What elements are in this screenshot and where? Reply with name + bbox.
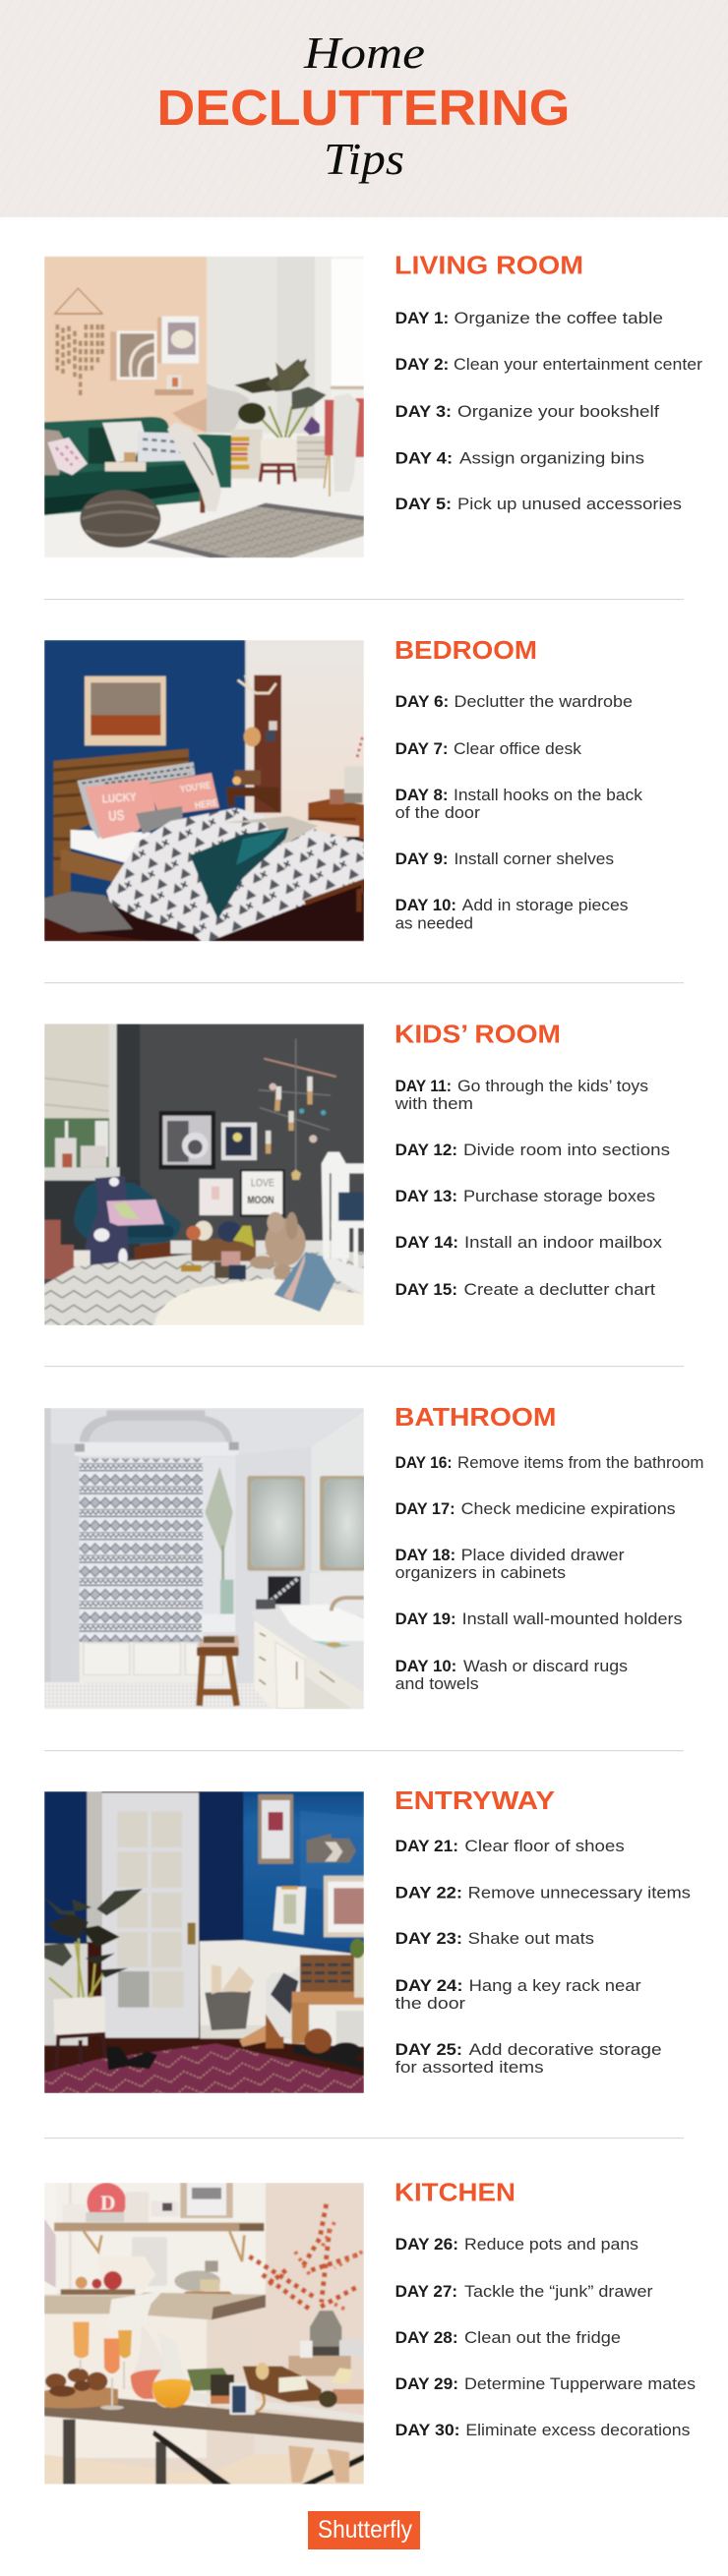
tip: day 18: DAY 18:	[395, 1547, 455, 1564]
tip: day 29: Determine Tupperware mates	[464, 2375, 696, 2393]
photo: bedroom: HERE	[194, 797, 219, 812]
photo: bedroom	[44, 640, 364, 941]
tip: day 9: DAY 9:	[395, 850, 449, 868]
heading: bedroom: BEDROOM	[394, 637, 537, 665]
tip: day 1	[395, 310, 663, 327]
tip: day 10 (bathroom)	[395, 1658, 628, 1693]
photo: entryway	[44, 1791, 365, 2093]
tip: day 18: organizers in cabinets	[395, 1564, 566, 1582]
tip: day 12: DAY 12:	[395, 1142, 457, 1159]
tip: day 17: Check medicine expirations	[461, 1500, 676, 1518]
panel: bathroom	[44, 1404, 704, 1709]
tip: day 5: Pick up unused accessories	[457, 496, 682, 513]
tip: day 10: Add in storage pieces	[462, 897, 629, 914]
tip: day 25: DAY 25:	[395, 2041, 462, 2059]
tip: day 19: Install wall-mounted holders	[462, 1610, 683, 1628]
tip: day 28: DAY 28:	[395, 2329, 458, 2347]
heading: kids' room: KIDS’ ROOM	[394, 1022, 561, 1049]
tip: day 25: Add decorative storage	[469, 2041, 662, 2059]
tip: day 8: Install hooks on the back	[454, 787, 643, 804]
tip: day 9: Install corner shelves	[455, 850, 614, 868]
tip: day 11: Go through the kids’ toys	[457, 1078, 648, 1095]
tip: day 10	[395, 897, 629, 932]
tip: day 6: DAY 6:	[395, 693, 449, 711]
tip: day 8: DAY 8:	[395, 787, 449, 804]
tip: day 10 (bathroom): Wash or discard rugs	[463, 1658, 628, 1675]
panel: entryway	[44, 1787, 691, 2093]
title: Home: Home	[303, 28, 425, 78]
tip: day 6: Declutter the wardrobe	[455, 693, 633, 711]
panel: kids' room	[44, 1022, 670, 1325]
panel: kitchen	[44, 2180, 696, 2485]
tip: day 4: Assign organizing bins	[459, 450, 644, 468]
tip: day 27: DAY 27:	[395, 2283, 457, 2301]
tip: day 22: DAY 22:	[395, 1885, 462, 1903]
photo: kids' room: LOVE	[251, 1178, 274, 1190]
photo: kids' room: MOON	[247, 1195, 274, 1206]
tip: day 30: Eliminate excess decorations	[465, 2422, 690, 2439]
tip: day 9	[395, 850, 614, 868]
tip: day 28: Clean out the fridge	[464, 2329, 621, 2347]
tip: day 29: DAY 29:	[395, 2375, 458, 2393]
tip: day 4	[395, 450, 644, 468]
tip: day 11	[394, 1078, 648, 1113]
photo: bedroom: US	[108, 808, 125, 825]
tip: day 24: DAY 24:	[395, 1977, 462, 1995]
tip: day 24	[395, 1977, 641, 2013]
tip: day 14: Install an indoor mailbox	[464, 1234, 663, 1252]
tip: day 28	[395, 2329, 621, 2347]
tip: day 26	[395, 2236, 638, 2254]
header banner	[0, 0, 728, 217]
logo: Shutterfly: Shutterfly	[318, 2516, 412, 2544]
tip: day 14: DAY 14:	[395, 1234, 458, 1252]
photo: kids' room	[44, 1024, 364, 1325]
tip: day 7: DAY 7:	[395, 740, 449, 758]
tip: day 27: Tackle the “junk” drawer	[464, 2283, 653, 2301]
tip: day 27	[395, 2283, 653, 2301]
tip: day 22: Remove unnecessary items	[468, 1885, 691, 1903]
tip: day 18	[395, 1547, 625, 1582]
tip: day 26: DAY 26:	[395, 2236, 458, 2254]
tip: day 6	[395, 693, 633, 711]
tip: day 21: DAY 21:	[395, 1838, 458, 1855]
tip: day 5: DAY 5:	[395, 496, 452, 513]
tip: day 15	[395, 1281, 655, 1299]
tip: day 19: DAY 19:	[395, 1610, 456, 1628]
tip: day 8	[395, 787, 643, 822]
tip: day 24: the door	[395, 1995, 466, 2013]
tip: day 15: Create a declutter chart	[464, 1281, 655, 1299]
heading: kitchen: KITCHEN	[394, 2180, 516, 2207]
tip: day 11: DAY 11:	[395, 1078, 452, 1095]
tip: day 13: Purchase storage boxes	[463, 1188, 655, 1205]
tip: day 10: DAY 10:	[395, 897, 456, 914]
photo: kitchen: D	[100, 2191, 115, 2214]
heading: bathroom: BATHROOM	[394, 1404, 556, 1432]
photo: bedroom: LUCKY	[101, 790, 137, 806]
tip: day 1: DAY 1:	[395, 310, 449, 327]
tip: day 2: DAY 2:	[395, 356, 449, 374]
photo: living room	[44, 257, 364, 557]
tip: day 17: DAY 17:	[395, 1500, 455, 1518]
tip: day 16: DAY 16:	[395, 1454, 453, 1472]
tip: day 10: as needed	[395, 914, 473, 932]
tip: day 11: with them	[394, 1095, 473, 1113]
panel: living room	[44, 252, 703, 557]
tip: day 8: of the door	[395, 804, 481, 822]
tip: day 10 (bathroom): DAY 10:	[395, 1658, 456, 1675]
tip: day 23: DAY 23:	[395, 1930, 462, 1948]
tip: day 7: Clear office desk	[454, 740, 582, 758]
tip: day 12	[395, 1142, 670, 1159]
photo: kitchen	[44, 2183, 364, 2485]
heading: entryway: ENTRYWAY	[394, 1787, 555, 1815]
tip: day 2: Clean your entertainment center	[454, 356, 703, 374]
tip: day 24: Hang a key rack near	[469, 1977, 641, 1995]
tip: day 30: DAY 30:	[395, 2422, 460, 2439]
tip: day 3: Organize your bookshelf	[457, 403, 659, 421]
tip: day 14	[395, 1234, 663, 1252]
tip: day 16: Remove items from the bathroom	[457, 1454, 704, 1472]
tip: day 3	[395, 403, 659, 421]
tip: day 12: Divide room into sections	[463, 1142, 670, 1159]
tip: day 7	[395, 740, 582, 758]
title: Decluttering: DECLUTTERING	[157, 80, 571, 136]
heading: living room: LIVING ROOM	[394, 252, 583, 279]
tip: day 10 (bathroom): and towels	[395, 1675, 479, 1693]
tip: day 13	[395, 1188, 655, 1205]
photo: bathroom	[44, 1408, 367, 1709]
tip: day 25: for assorted items	[395, 2059, 544, 2077]
logo: Shutterfly	[308, 2511, 420, 2549]
tip: day 3: DAY 3:	[395, 403, 452, 421]
tip: day 22	[395, 1885, 691, 1903]
tip: day 1: Organize the coffee table	[455, 310, 663, 327]
tip: day 25	[395, 2041, 662, 2077]
tip: day 23: Shake out mats	[468, 1930, 594, 1948]
tip: day 18: Place divided drawer	[461, 1547, 625, 1564]
panel: bedroom	[44, 637, 643, 941]
tip: day 26: Reduce pots and pans	[464, 2236, 638, 2254]
tip: day 13: DAY 13:	[395, 1188, 457, 1205]
tip: day 4: DAY 4:	[395, 450, 453, 468]
tip: day 15: DAY 15:	[395, 1281, 457, 1299]
tip: day 21	[395, 1838, 625, 1855]
title: Tips: Tips	[324, 134, 404, 184]
tip: day 21: Clear floor of shoes	[464, 1838, 625, 1855]
photo: bedroom: YOU'RE	[179, 781, 212, 795]
tip: day 23	[395, 1930, 594, 1948]
